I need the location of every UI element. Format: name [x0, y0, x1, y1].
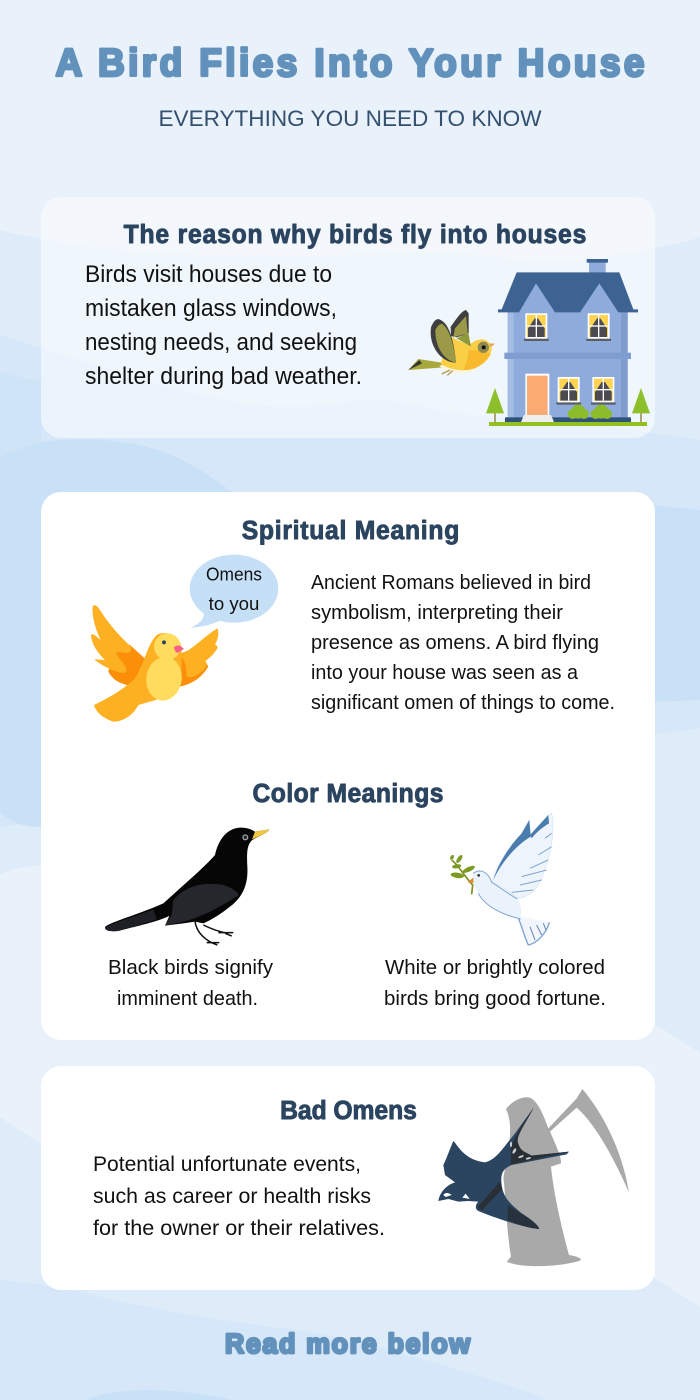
panel: reason why birds fly into houses: [41, 197, 655, 438]
text block: spiritual meaning: into your house was seen as a: [311, 661, 579, 684]
icon: white dove with olive branch: [449, 813, 553, 945]
panel: spiritual meaning and color meanings: [41, 492, 655, 1040]
text block: white birds: birds bring good fortune.: [384, 987, 606, 1010]
text block: white birds: White or brightly colored: [385, 956, 605, 979]
text block: reason: mistaken glass windows,: [85, 295, 337, 322]
text block: reason: Birds visit houses due to: [85, 261, 332, 288]
text block: black birds: [108, 956, 274, 1010]
icon: house: [486, 259, 650, 426]
text block: bad omens: [93, 1153, 385, 1240]
icon: orange bird with speech bubble: [91, 555, 278, 722]
text block: reason: shelter during bad weather.: [85, 363, 362, 390]
heading: bad omens: Bad Omens: [280, 1096, 417, 1125]
subtitle: EVERYTHING YOU NEED TO KNOW: [158, 106, 542, 131]
speech bubble: to you: [209, 593, 259, 614]
heading: color meanings: Color Meanings: [253, 779, 443, 808]
icon: flying yellow bird: [408, 310, 495, 375]
text block: spiritual meaning: [311, 571, 615, 714]
speech bubble: Omens: [206, 564, 262, 585]
speech bubble: [190, 555, 278, 628]
title: A Bird Flies Into Your House: [55, 42, 645, 85]
text block: black birds: Black birds signify: [108, 956, 274, 979]
text block: bad omens: such as career or health risks: [93, 1185, 371, 1208]
text block: spiritual meaning: symbolism, interpreting their: [311, 601, 563, 624]
read more link: Read more below: [225, 1327, 471, 1359]
heading: spiritual meaning: Spiritual Meaning: [242, 516, 459, 545]
heading: reason: The reason why birds fly into houses: [124, 220, 586, 249]
text block: spiritual meaning: Ancient Romans believed in bird: [311, 571, 591, 594]
text block: reason: nesting needs, and seeking: [85, 329, 357, 356]
text block: bad omens: Potential unfortunate events,: [93, 1153, 361, 1176]
text block: black birds: imminent death.: [117, 987, 258, 1010]
text block: reason: [85, 261, 362, 390]
icon: black bird: [105, 828, 269, 945]
icon: grim reaper and swallow: [438, 1089, 629, 1266]
text block: white birds: [384, 956, 606, 1010]
text block: bad omens: for the owner or their relatives.: [93, 1217, 385, 1240]
panel: bad omens: [41, 1066, 655, 1290]
text block: spiritual meaning: significant omen of things to come.: [311, 691, 615, 714]
text block: spiritual meaning: presence as omens. A bird flying: [311, 631, 599, 654]
